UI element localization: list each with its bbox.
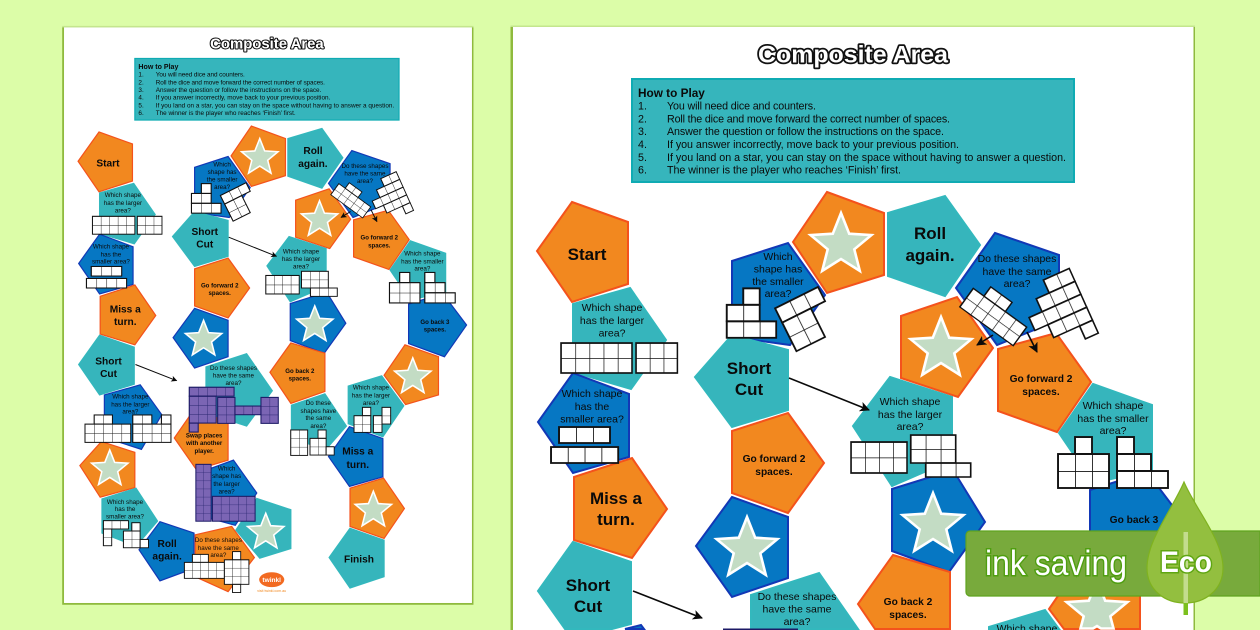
game spaces	[78, 126, 467, 592]
space labels: Which	[218, 465, 236, 472]
space labels: area?	[784, 616, 811, 628]
space labels: Roll	[914, 224, 946, 243]
space labels: area?	[1100, 425, 1127, 437]
space labels: area?	[293, 263, 310, 270]
panel: how to play: 1.	[638, 100, 647, 112]
space labels: again.	[152, 551, 182, 562]
space labels: Cut	[100, 369, 118, 380]
panel: how to play: 4.	[638, 139, 647, 151]
panel: how to play: 2.	[138, 79, 144, 86]
space labels: Which shape	[283, 248, 320, 255]
panel: how to play: The winner is the player who reaches ‘Finish’ first.	[156, 110, 296, 117]
space labels: area?	[214, 184, 231, 191]
space labels: smaller area?	[106, 514, 145, 521]
space labels: has the larger	[111, 401, 150, 408]
space labels: spaces.	[368, 242, 391, 249]
stars	[717, 213, 1127, 628]
space labels: Roll	[158, 539, 177, 550]
panel: how to play: How to Play	[138, 64, 178, 71]
space labels: Go forward 2	[361, 235, 399, 242]
panel: how to play: 2.	[638, 114, 647, 126]
space labels: Do these shapes	[195, 537, 242, 544]
space labels: Go forward 2	[743, 454, 806, 465]
space labels: Do these	[306, 400, 331, 407]
space labels: area?	[357, 178, 373, 185]
space labels: the smaller	[207, 177, 237, 184]
space labels: Which shape	[107, 499, 144, 506]
space labels: has the larger	[878, 409, 943, 421]
stars	[92, 139, 431, 548]
panel: how to play: 6.	[638, 165, 647, 177]
space labels: Do these shapes	[341, 163, 388, 170]
space labels: has the smaller	[1077, 413, 1149, 425]
composite shape grids	[85, 172, 455, 593]
panel: how to play: 6.	[138, 110, 144, 117]
space labels: Do these shapes	[210, 365, 257, 372]
space labels: shapes have	[301, 408, 337, 415]
space labels: Start	[568, 245, 607, 264]
panel: how to play: If you land on a star, you can stay on the space without having to answer a question.	[667, 152, 1066, 164]
space labels: Which shape	[105, 192, 142, 199]
space labels: Go back 3	[420, 319, 450, 326]
purple composite shape	[723, 628, 798, 630]
space labels: area?	[219, 488, 235, 495]
panel: how to play: 4.	[138, 95, 144, 102]
space labels: shape has	[208, 169, 237, 176]
space labels: Which shape	[404, 251, 441, 258]
space labels: the same	[305, 415, 332, 422]
space labels: has the larger	[580, 315, 645, 327]
panel: how to play: How to Play	[638, 86, 705, 100]
space labels: Which shape	[582, 302, 643, 314]
space labels: has the larger	[282, 256, 320, 263]
arrows	[633, 332, 1037, 618]
space labels: Which shape	[562, 388, 623, 400]
panel: how to play: The winner is the player who reaches ‘Finish’ first.	[667, 165, 901, 177]
space labels: Which shape	[1083, 400, 1144, 412]
icon: leaf stem	[1184, 532, 1188, 603]
space labels: area?	[363, 400, 379, 407]
space labels: smaller area?	[560, 413, 624, 425]
space labels: area?	[414, 266, 431, 273]
space labels: spaces.	[289, 376, 311, 383]
space labels: has the	[575, 401, 609, 413]
ink saving eco banner	[966, 482, 1260, 615]
panel: how to play: If you answer incorrectly, move back to your previous position.	[156, 95, 331, 102]
logo: twinkl: twinkl	[262, 577, 281, 584]
panel: how to play: You will need dice and counters.	[667, 100, 816, 112]
space labels: Which shape	[93, 244, 130, 251]
title: Composite Area	[758, 42, 949, 68]
space labels: Go forward 2	[201, 282, 239, 289]
space labels: Which shape	[353, 385, 390, 392]
space labels: area?	[225, 380, 242, 387]
space labels: again.	[905, 246, 955, 265]
space labels: have the same	[213, 372, 255, 379]
space labels: Which shape	[880, 396, 941, 408]
panel: how to play: You will need dice and counters.	[156, 72, 245, 79]
icon: eco leaf	[1147, 482, 1223, 603]
panel: how to play: If you land on a star, you can stay on the space without having to answer a question.	[156, 102, 394, 109]
space labels: area?	[765, 288, 792, 300]
space labels: turn.	[597, 510, 635, 529]
space labels: have the same	[983, 266, 1052, 278]
space labels: spaces.	[424, 327, 446, 334]
space labels: Which shape	[112, 394, 149, 401]
panel: how to play: 3.	[138, 87, 144, 94]
space labels: Short	[192, 227, 219, 238]
panel: how to play: 5.	[138, 102, 144, 109]
space labels: area?	[599, 328, 626, 340]
panel: left full game board sheet	[62, 26, 473, 605]
panel: how to play	[632, 79, 1074, 182]
space labels: has the larger	[104, 200, 142, 207]
space labels: the smaller	[752, 276, 804, 288]
space labels: Go forward 2	[1010, 374, 1073, 385]
space labels	[92, 146, 450, 565]
title: Composite Area	[210, 37, 325, 53]
icon: leaf stem base	[1184, 603, 1188, 615]
space labels: Cut	[735, 380, 763, 399]
space labels: Which	[213, 162, 231, 169]
space labels: Short	[95, 357, 122, 368]
space labels: turn.	[114, 317, 137, 328]
panel: how to play: Roll the dice and move forward the correct number of spaces.	[667, 114, 950, 126]
space labels: area?	[1004, 278, 1031, 290]
space labels	[560, 224, 1159, 630]
space labels: spaces.	[1022, 387, 1060, 398]
space labels: spaces.	[889, 610, 927, 621]
space labels: Miss a	[590, 489, 643, 508]
space labels: with another	[185, 440, 223, 447]
space labels: have the same	[763, 604, 832, 616]
space labels: Finish	[344, 554, 374, 565]
space labels: spaces.	[209, 290, 231, 297]
space labels: have the same	[198, 545, 239, 552]
panel: how to play: Answer the question or follow the instructions on the space.	[156, 87, 322, 94]
space labels: Go back 2	[884, 597, 933, 608]
purple composite shapes	[189, 387, 278, 521]
space labels: Miss a	[342, 447, 374, 458]
panel: how to play	[135, 58, 399, 120]
space labels: Short	[566, 576, 611, 595]
panel: how to play: 1.	[138, 72, 144, 79]
space labels: Do these shapes	[758, 591, 836, 603]
logo: twinkl: visit twinkl.com.au	[257, 589, 286, 593]
arrows	[135, 210, 377, 381]
space labels: again.	[298, 159, 328, 170]
space labels: shape has	[212, 473, 241, 480]
panel: right zoomed game board sheet	[510, 26, 1195, 630]
space labels: has the smaller	[401, 258, 444, 265]
composite shape grids	[551, 268, 1168, 488]
space labels: shape has	[754, 264, 802, 276]
space labels: area?	[122, 409, 139, 416]
space labels: smaller area?	[92, 259, 130, 266]
space labels: Which	[763, 251, 793, 263]
space labels: Miss a	[110, 305, 141, 316]
space labels: Start	[96, 159, 120, 170]
space labels: Do these shapes	[978, 253, 1056, 265]
space labels: has the	[101, 251, 122, 258]
space labels: the larger	[213, 481, 240, 488]
panel: how to play: Roll the dice and move forward the correct number of spaces.	[156, 79, 325, 86]
space labels: has the	[115, 506, 136, 513]
space labels: area?	[115, 208, 131, 215]
space labels: area?	[310, 423, 327, 430]
logo: twinkl	[257, 572, 286, 593]
space labels: have the same	[344, 171, 386, 178]
space labels: spaces.	[755, 467, 793, 478]
panel: how to play: If you answer incorrectly, move back to your previous position.	[667, 139, 959, 151]
panel: how to play: Answer the question or follow the instructions on the space.	[667, 126, 944, 138]
space labels: Cut	[196, 239, 214, 250]
banner text: ink saving	[985, 544, 1127, 583]
panel: how to play: 5.	[638, 152, 647, 164]
space labels: Cut	[574, 597, 602, 616]
game spaces	[537, 192, 1187, 629]
space labels: Short	[727, 359, 772, 378]
space labels: turn.	[346, 460, 369, 471]
space labels: Go back 3	[1110, 515, 1159, 526]
space labels: area?	[897, 421, 924, 433]
space labels: Roll	[303, 146, 323, 157]
space labels: area?	[210, 552, 227, 559]
space labels: Go back 2	[285, 368, 315, 375]
eco label: Eco	[1160, 546, 1212, 579]
space labels: has the larger	[352, 392, 390, 399]
space labels: player.	[195, 448, 214, 455]
space labels: Swap places	[186, 432, 223, 439]
panel: how to play: 3.	[638, 126, 647, 138]
